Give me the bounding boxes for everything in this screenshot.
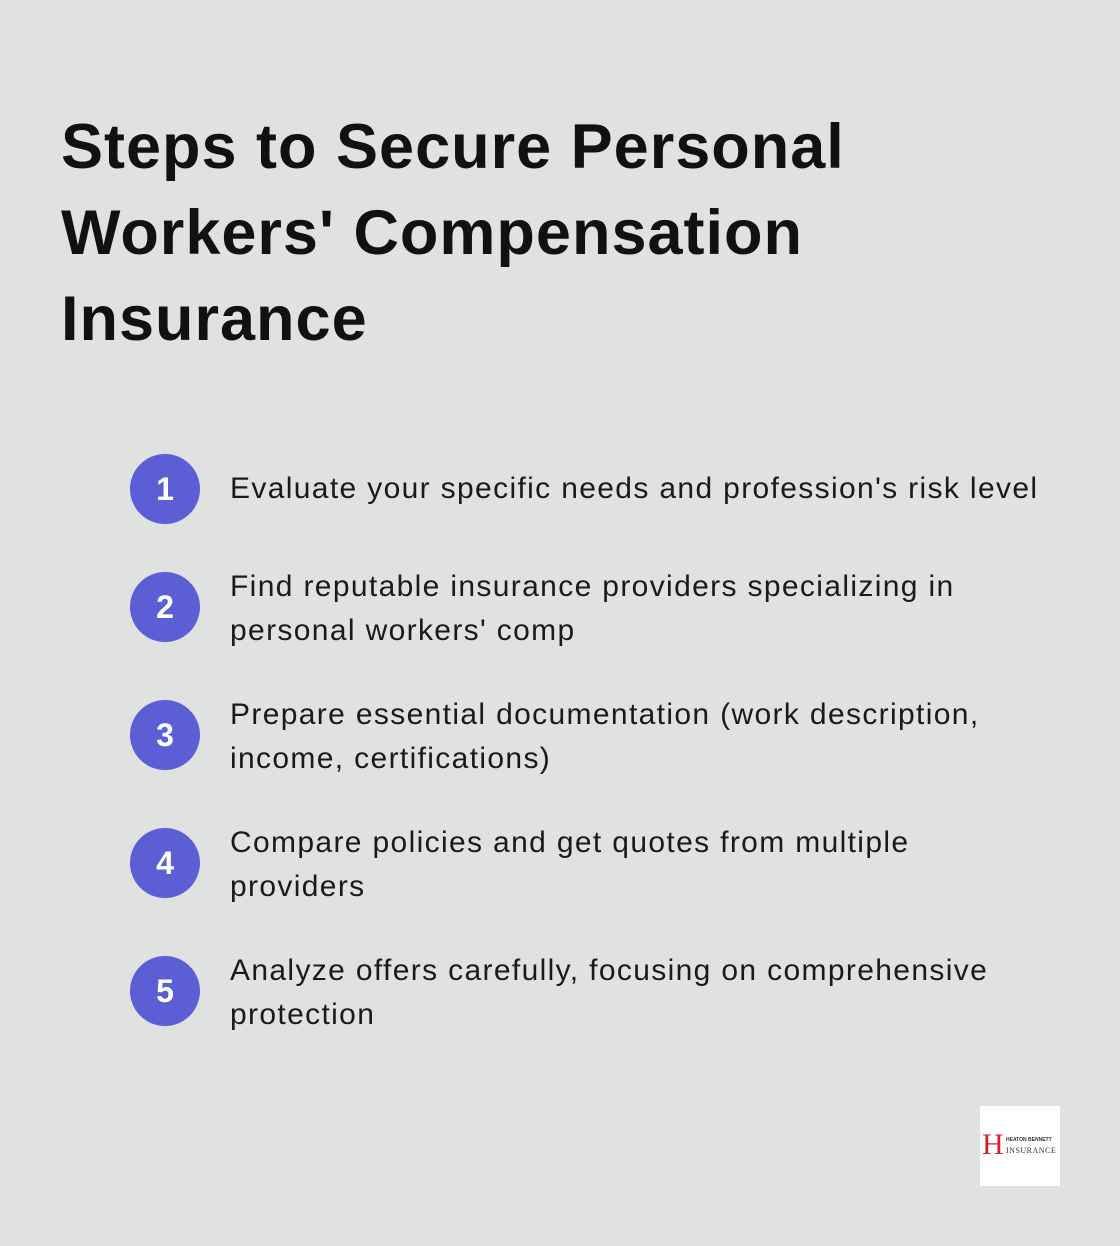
step 1: Evaluate your specific needs and profession's risk level bbox=[230, 472, 1038, 505]
step 1 bbox=[130, 454, 1038, 524]
logo bbox=[980, 1106, 1060, 1186]
step 1: 1 bbox=[156, 471, 174, 507]
step 4: 4 bbox=[156, 845, 174, 881]
logo: HEATON BENNETT bbox=[1006, 1137, 1052, 1143]
step 2: 2 bbox=[156, 589, 174, 625]
step 2: Find reputable insurance providers specializing in personal workers' comp bbox=[230, 570, 955, 647]
step 3: 3 bbox=[156, 717, 174, 753]
step 5: 5 bbox=[156, 973, 174, 1009]
step 4: Compare policies and get quotes from multiple providers bbox=[230, 826, 909, 903]
step 5: Analyze offers carefully, focusing on comprehensive protection bbox=[230, 954, 988, 1031]
title: Steps to Secure Personal Workers' Compensation Insurance bbox=[61, 112, 845, 354]
step 3: Prepare essential documentation (work description, income, certifications) bbox=[230, 698, 980, 775]
logo: H bbox=[982, 1128, 1004, 1161]
logo: INSURANCE bbox=[1006, 1146, 1056, 1155]
